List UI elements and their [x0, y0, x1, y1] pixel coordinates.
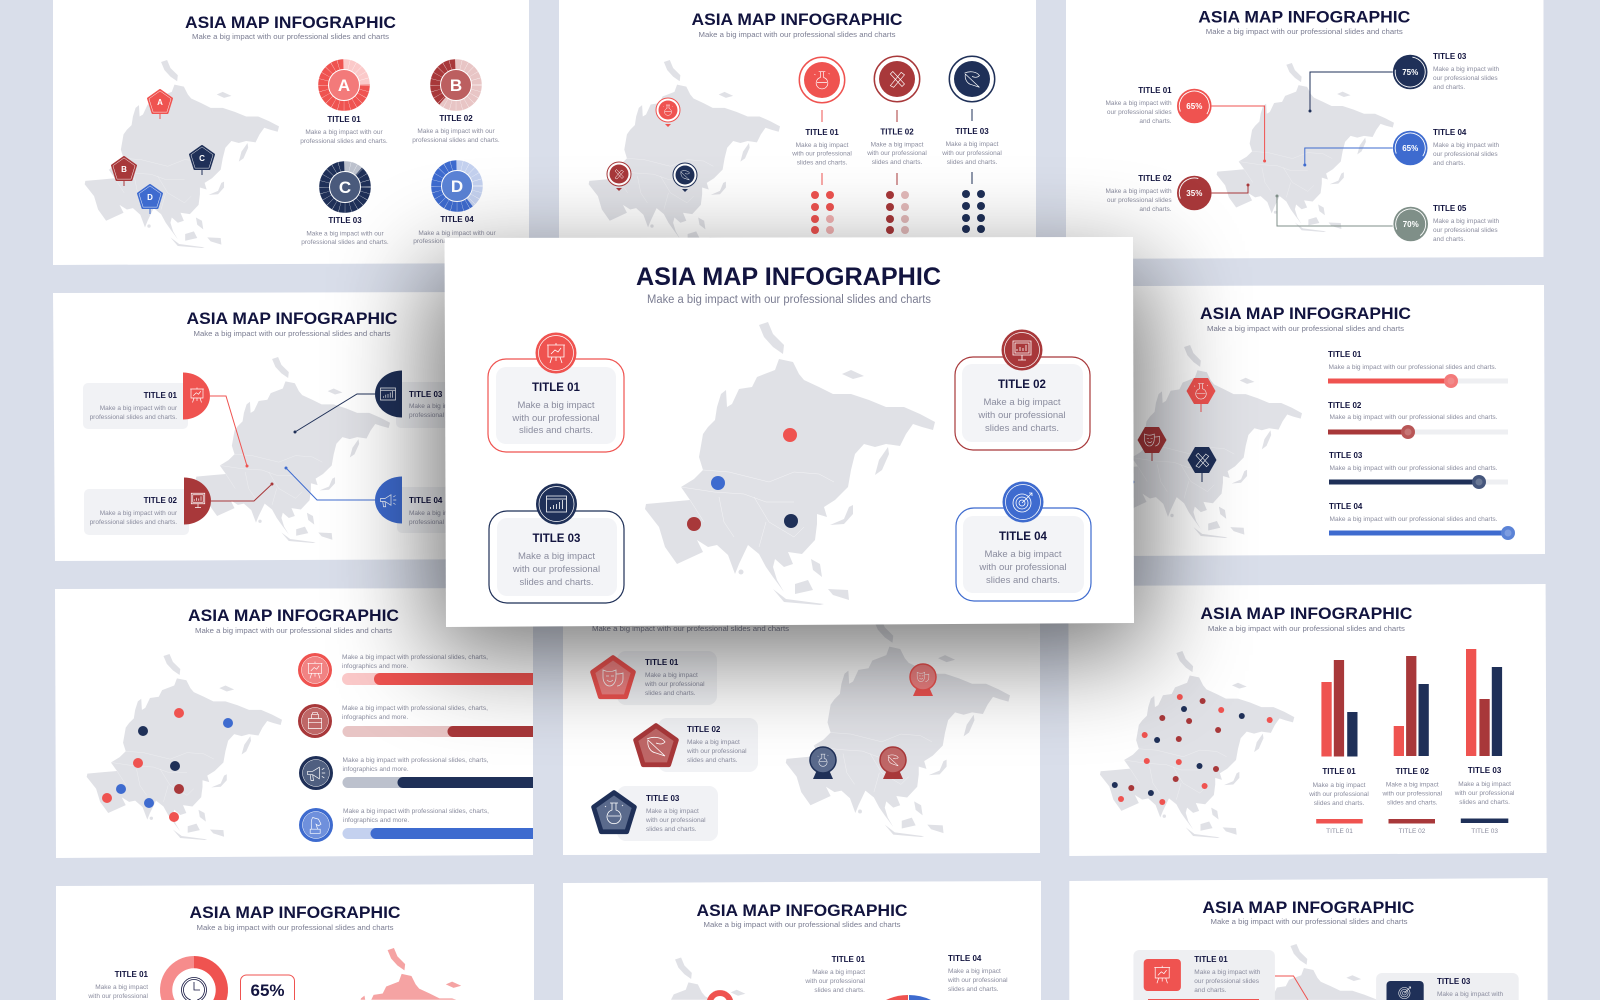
card: title 03: slides and charts.	[520, 577, 593, 588]
map	[1100, 651, 1294, 838]
pin 2	[607, 162, 631, 191]
row 3: Make a big impact with professional slides, charts,	[342, 757, 489, 764]
ring A	[324, 64, 364, 106]
list texts: Make a big impact	[646, 808, 699, 815]
pentagon 2	[636, 726, 676, 765]
chart captions	[1308, 766, 1515, 807]
pin 2	[810, 747, 836, 779]
card: title 02: slides and charts.	[985, 423, 1059, 434]
badge 2	[874, 56, 920, 102]
item text	[87, 970, 149, 1000]
item texts: slides and charts.	[948, 986, 999, 993]
card 03	[1376, 973, 1519, 1000]
slider 01: TITLE 01	[1328, 350, 1362, 359]
gauge 70% grey: 70%	[1403, 220, 1419, 229]
texts: Make a big impact with	[1105, 188, 1172, 195]
texts: TITLE 01	[1138, 86, 1172, 95]
chart captions: TITLE 01	[1322, 767, 1356, 776]
map (upper part, cropped by frame)	[361, 948, 461, 1000]
heading: ASIA MAP INFOGRAPHIC	[696, 901, 908, 920]
tab 03	[375, 370, 402, 418]
row 2: Make a big impact with professional slides, charts,	[342, 705, 488, 712]
list texts: TITLE 02	[687, 725, 721, 734]
card 01: Make a big impact with	[1194, 969, 1261, 976]
subtitle: Make a big impact with our professional slides and charts	[704, 920, 901, 929]
connectors	[1212, 72, 1393, 226]
legend: TITLE 01	[1326, 828, 1353, 835]
gauge 35% maroon: 35%	[1186, 189, 1202, 198]
list texts: slides and charts.	[646, 826, 697, 833]
chart captions: TITLE 03	[1468, 766, 1502, 775]
column 1: slides and charts.	[797, 160, 847, 166]
card: title 03: Make a big impact	[518, 551, 595, 562]
map dots	[102, 708, 233, 822]
map (upper part, cropped by frame)	[671, 958, 745, 1000]
pin 1	[656, 98, 680, 127]
list texts: with our professional	[686, 748, 747, 755]
slider 04	[1329, 502, 1515, 540]
row 4: infographics and more.	[343, 817, 409, 824]
item texts: TITLE 04	[440, 215, 474, 224]
row 4: Make a big impact with professional slides, charts,	[343, 808, 489, 815]
ring C: C	[339, 178, 351, 197]
tab 02	[184, 478, 211, 524]
subtitle: Make a big impact with our professional slides and charts	[194, 329, 391, 338]
pie	[886, 995, 931, 1000]
column 2: with our professional	[866, 150, 927, 157]
panel: slide pie	[563, 881, 1041, 1000]
card 03: TITLE 03	[1437, 977, 1471, 986]
list texts: slides and charts.	[687, 757, 738, 764]
item texts: professional slides and charts.	[300, 138, 388, 145]
panel: slide half circles	[53, 292, 530, 561]
panel: slide donut and pink map	[56, 884, 534, 1000]
panel: slide circle icons with dots	[559, 0, 1036, 248]
item texts: TITLE 04	[948, 954, 982, 963]
legend	[1316, 818, 1508, 835]
texts: TITLE 04	[409, 496, 443, 505]
list texts: slides and charts.	[645, 690, 696, 697]
pin 3	[673, 163, 697, 192]
connectors	[210, 394, 375, 501]
item text: with our professional	[87, 993, 149, 1000]
hexagon 4 partly hidden	[1106, 469, 1134, 495]
item texts: with our professional	[804, 978, 866, 985]
row 1: infographics and more.	[342, 663, 408, 670]
ring D: D	[451, 177, 463, 196]
card: title 01	[488, 332, 624, 452]
chart captions: Make a big impact	[1458, 781, 1511, 788]
card: title 04	[956, 482, 1091, 601]
heading: ASIA MAP INFOGRAPHIC	[1200, 604, 1412, 623]
heading: ASIA MAP INFOGRAPHIC	[1198, 8, 1410, 27]
map (upper part, cropped by frame)	[1262, 944, 1389, 1000]
row 2: infographics and more.	[342, 714, 408, 721]
card: title 01: TITLE 01	[532, 382, 581, 394]
pentagon 1	[593, 658, 633, 697]
map marker red	[783, 428, 797, 442]
subtitle: Make a big impact with our professional slides and charts	[647, 294, 931, 306]
subtitle: Make a big impact with our professional slides and charts	[1206, 27, 1403, 36]
texts: and charts.	[1433, 236, 1465, 243]
card: title 03: TITLE 03	[533, 533, 580, 545]
texts: Make a big impact with our	[100, 510, 178, 517]
map	[1108, 345, 1302, 538]
map	[645, 322, 935, 605]
column 1: Make a big impact	[796, 142, 849, 149]
hexagon 1	[1186, 378, 1216, 412]
item texts: Make a big impact with our	[305, 129, 383, 136]
heading: ASIA MAP INFOGRAPHIC	[188, 606, 399, 625]
tab 01	[183, 372, 210, 420]
chart captions: with our professional	[1454, 790, 1515, 797]
card: title 02: Make a big impact	[983, 397, 1061, 408]
card: title 04: Make a big impact	[984, 549, 1062, 560]
texts: Make a big impact with our	[409, 403, 487, 410]
texts: TITLE 04	[1433, 128, 1467, 137]
donut	[160, 956, 228, 1000]
heading: ASIA MAP INFOGRAPHIC	[190, 903, 400, 922]
marker B: B	[121, 165, 127, 174]
texts: Make a big impact with	[1433, 142, 1499, 149]
texts: TITLE 05	[1433, 204, 1467, 213]
hexagon 3	[1188, 447, 1216, 482]
slider 01	[1328, 350, 1508, 388]
card 01: and charts.	[1194, 987, 1227, 994]
marker D: D	[147, 193, 153, 202]
marker C: C	[199, 154, 205, 163]
slider 03: Make a big impact with our professional slides and charts.	[1330, 465, 1498, 472]
badge 3	[949, 56, 995, 102]
panel: slide A-D donut rings	[53, 0, 529, 265]
card: title 04: slides and charts.	[986, 575, 1060, 586]
column 2: slides and charts.	[872, 159, 922, 166]
map	[589, 60, 780, 248]
texts: our professional slides	[1107, 197, 1172, 204]
texts: professional slides and charts.	[90, 519, 177, 526]
item texts: professional slides and charts.	[413, 238, 501, 245]
texts: TITLE 02	[1138, 174, 1172, 183]
item texts: Make a big impact with our	[306, 230, 384, 238]
slider 03: TITLE 03	[1329, 451, 1363, 460]
texts: our professional slides	[1107, 109, 1172, 116]
value box	[240, 975, 294, 1000]
slider 04: TITLE 04	[1329, 502, 1363, 511]
badge 1	[799, 57, 845, 103]
heading: ASIA MAP INFOGRAPHIC	[186, 309, 398, 328]
card: title 04: with our professional	[978, 562, 1067, 573]
bars group 1	[1321, 660, 1358, 756]
card: title 01: slides and charts.	[519, 425, 593, 436]
column 2: TITLE 02	[880, 128, 914, 136]
heading: ASIA MAP INFOGRAPHIC	[1202, 898, 1414, 917]
list panels	[617, 651, 758, 841]
texts: professional slides and charts.	[90, 414, 177, 421]
marker C	[190, 146, 214, 175]
card: title 02	[955, 330, 1090, 450]
row 3	[299, 756, 533, 790]
slider 02: TITLE 02	[1328, 401, 1362, 410]
card: title 01: with our professional	[511, 413, 600, 424]
pentagon 3	[594, 793, 634, 832]
texts	[90, 390, 497, 526]
column 1: with our professional	[791, 150, 852, 158]
gauge 65% blue: 65%	[1402, 144, 1418, 153]
slider 02: Make a big impact with our professional slides and charts.	[1330, 414, 1498, 421]
card 03: Make a big impact with	[1437, 991, 1503, 998]
list texts: with our professional	[644, 681, 705, 688]
card: title 01: Make a big impact	[517, 400, 595, 411]
gauge 65% blue	[1391, 129, 1429, 167]
ring C	[316, 158, 374, 216]
row 4	[299, 808, 533, 842]
map	[85, 60, 279, 248]
texts: and charts.	[1139, 118, 1172, 125]
item texts: Make a big impact with our	[417, 128, 495, 135]
column 3: Make a big impact	[946, 141, 999, 148]
item texts: Make a big impact	[948, 968, 1001, 975]
texts: professional slides and charts.	[409, 519, 497, 526]
item texts: professional slides and charts.	[301, 239, 389, 246]
panel: slide horizontal bars	[55, 588, 533, 858]
card: title 04: TITLE 04	[999, 531, 1048, 543]
chart captions: Make a big impact	[1313, 782, 1366, 789]
subtitle: Make a big impact with our professional slides and charts	[1208, 624, 1405, 633]
slider 03	[1329, 451, 1508, 489]
map	[786, 618, 1010, 837]
marker D	[138, 185, 162, 214]
texts: and charts.	[1433, 160, 1465, 167]
legend: TITLE 02	[1399, 828, 1426, 835]
map	[1217, 63, 1394, 232]
gauge 75% navy: 75%	[1402, 68, 1418, 77]
item texts: TITLE 01	[832, 955, 866, 964]
card: title 02: with our professional	[977, 410, 1066, 421]
map marker blue	[711, 476, 725, 490]
chart captions: with our professional	[1308, 791, 1369, 798]
item texts	[300, 114, 501, 246]
card 01: TITLE 01	[1194, 955, 1228, 964]
text panels	[83, 382, 497, 535]
column 3	[941, 109, 1002, 233]
marker B	[112, 157, 136, 186]
heading: ASIA MAP INFOGRAPHIC	[1200, 304, 1411, 323]
card 01	[1133, 950, 1275, 1000]
drop shadow of centre slide	[430, 267, 1148, 655]
ring B	[427, 56, 485, 114]
item texts: slides and charts.	[814, 987, 865, 994]
slider 01: Make a big impact with our professional slides and charts.	[1328, 364, 1497, 371]
panel: slide bar chart	[1068, 584, 1547, 856]
texts: TITLE 03	[409, 390, 443, 399]
heading: ASIA MAP INFOGRAPHIC	[185, 13, 396, 32]
list texts: with our professional	[645, 817, 706, 824]
texts: Make a big impact with our	[409, 510, 487, 517]
ring B: B	[450, 76, 462, 95]
map	[87, 654, 282, 840]
connector	[1275, 976, 1308, 1000]
column 1: TITLE 01	[805, 128, 839, 137]
column 3: TITLE 03	[955, 127, 989, 136]
subtitle: Make a big impact with our professional slides and charts	[592, 624, 789, 633]
subtitle: Make a big impact with our professional slides and charts	[698, 30, 896, 39]
column 1	[791, 110, 852, 234]
pin 3	[880, 747, 906, 779]
gauge 35% maroon	[1175, 174, 1214, 212]
slider 04: Make a big impact with our professional slides and charts.	[1330, 516, 1498, 523]
chart captions: slides and charts.	[1314, 800, 1364, 807]
gauge 75% navy	[1393, 55, 1428, 89]
map	[196, 357, 390, 543]
bars group 2	[1394, 656, 1429, 756]
chart captions: Make a big impact	[1386, 782, 1439, 788]
gauge 65% red	[1175, 87, 1214, 125]
gauge 70% grey	[1391, 205, 1430, 243]
item texts: professional slides and charts.	[412, 137, 500, 144]
bars group 3	[1466, 649, 1502, 756]
subtitle: Make a big impact with our professional slides and charts	[1207, 324, 1404, 333]
chart captions: TITLE 02	[1396, 767, 1430, 776]
item texts: TITLE 02	[439, 114, 473, 123]
panel: slide percentage callouts	[1066, 0, 1544, 259]
slider 02	[1328, 401, 1508, 439]
row 1: Make a big impact with professional slides, charts,	[342, 654, 488, 661]
texts: and charts.	[1139, 206, 1172, 213]
subtitle: Make a big impact with our professional slides and charts	[192, 32, 389, 41]
panel: centre slide	[444, 237, 1134, 627]
item text: Make a big impact	[95, 984, 148, 991]
item texts	[804, 954, 1008, 994]
column 2: Make a big impact	[871, 142, 924, 148]
texts: Make a big impact with	[1105, 100, 1172, 107]
row 1	[298, 653, 533, 687]
ring D	[428, 157, 486, 215]
texts: Make a big impact with	[1433, 66, 1499, 73]
list texts: TITLE 03	[646, 794, 680, 803]
card 01: our professional slides	[1194, 978, 1260, 985]
legend: TITLE 03	[1471, 828, 1498, 835]
column 3: with our professional	[941, 150, 1002, 157]
chart captions: slides and charts.	[1387, 800, 1438, 806]
texts: TITLE 03	[1433, 52, 1467, 61]
card: title 02: TITLE 02	[998, 379, 1046, 391]
subtitle: Make a big impact with our professional slides and charts	[196, 923, 394, 932]
item text: TITLE 01	[115, 970, 149, 979]
list texts: Make a big impact	[687, 739, 740, 746]
texts: our professional slides	[1433, 151, 1498, 158]
card: title 03	[489, 484, 624, 603]
panel: slide progress sliders	[1106, 285, 1545, 556]
row 3: infographics and more.	[342, 766, 409, 773]
panel: slide icon cards	[1069, 878, 1548, 1000]
panel: slide pentagon list	[563, 590, 1040, 855]
texts: professional slides and charts.	[409, 412, 497, 419]
tab 04	[375, 476, 402, 524]
gauge 65% red: 65%	[1186, 102, 1202, 111]
row 2	[298, 704, 533, 738]
list texts: Make a big impact	[645, 672, 698, 679]
red pin	[707, 990, 733, 1000]
marker A	[148, 90, 172, 119]
texts: our professional slides	[1433, 227, 1498, 234]
texts: our professional slides	[1433, 75, 1498, 82]
list texts	[644, 658, 747, 833]
column 3: slides and charts.	[947, 159, 997, 166]
texts: and charts.	[1433, 84, 1465, 91]
column 2	[866, 110, 927, 234]
texts: Make a big impact with	[1433, 218, 1499, 225]
card: title 03: with our professional	[512, 564, 600, 575]
texts	[1105, 52, 1499, 243]
chart captions: slides and charts.	[1459, 799, 1510, 806]
list texts: TITLE 01	[645, 658, 679, 667]
item texts: TITLE 03	[328, 216, 362, 225]
subtitle: Make a big impact with our professional slides and charts	[1210, 917, 1408, 926]
map dots	[1112, 694, 1273, 805]
pin 1	[910, 664, 936, 696]
value box: 65%	[250, 981, 285, 1000]
map marker navy	[784, 514, 798, 528]
texts: Make a big impact with our	[100, 405, 178, 412]
subtitle: Make a big impact with our professional slides and charts	[195, 626, 392, 635]
heading: ASIA MAP INFOGRAPHIC	[636, 263, 941, 291]
hexagon 2	[1138, 427, 1166, 461]
map marker maroon	[687, 517, 701, 531]
item texts: with our professional	[947, 977, 1008, 984]
item texts: TITLE 01	[327, 115, 361, 124]
texts: TITLE 02	[144, 496, 178, 505]
chart captions: with our professional	[1381, 790, 1443, 798]
texts: TITLE 01	[144, 391, 178, 400]
item texts: Make a big impact with our	[418, 230, 496, 237]
marker A: A	[157, 98, 163, 107]
item texts: Make a big impact	[812, 969, 865, 976]
ring A: A	[338, 76, 350, 95]
heading: ASIA MAP INFOGRAPHIC	[692, 10, 902, 29]
